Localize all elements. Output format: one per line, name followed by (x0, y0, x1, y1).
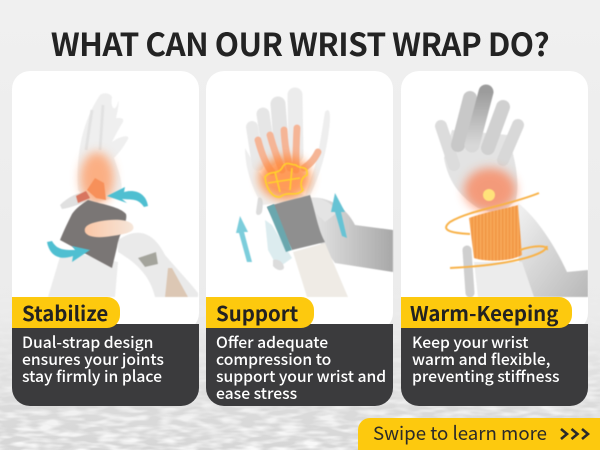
caption: ease stress (216, 381, 297, 404)
heading tag: Warm-Keeping (410, 297, 558, 327)
caption (412, 330, 560, 387)
arrow: top blue (107, 187, 148, 207)
heading tag: Support (216, 297, 298, 327)
grey wrap (267, 195, 325, 250)
title: WHAT CAN OUR WRIST WRAP DO? (51, 20, 549, 66)
illustration: hand with wrap (236, 88, 394, 298)
caption: ensures your joints (22, 347, 164, 370)
image card (12, 71, 199, 331)
grey wrap (60, 200, 126, 268)
illustration: wrist with straps (46, 94, 198, 298)
arrow: right up (331, 193, 347, 238)
icon: chevrons (560, 428, 590, 440)
arrow: bottom blue (47, 241, 90, 262)
arrow: left up (236, 216, 252, 262)
swipe text: Swipe to learn more (373, 419, 547, 446)
panel: warm-keeping (401, 71, 588, 406)
caption: Offer adequate (216, 330, 328, 353)
dark caption box (12, 324, 199, 406)
caption: stay firmly in place (22, 364, 162, 387)
caption: Dual-strap design (22, 330, 153, 353)
image card (401, 71, 588, 331)
caption: preventing stiffness (412, 364, 560, 387)
background with knit texture (0, 337, 600, 450)
glowing carpal bones (265, 163, 307, 197)
caption: compression to (216, 347, 331, 370)
thumb (85, 220, 134, 237)
orange ribbed wrap (469, 205, 522, 261)
caption (22, 330, 164, 387)
caption: Keep your wrist (412, 330, 529, 353)
heat swirl (446, 193, 547, 268)
orange glow (80, 152, 114, 204)
image card (206, 71, 393, 331)
panel: stabilize (12, 71, 199, 406)
swipe banner (358, 418, 600, 450)
caption: warm and flexible, (412, 347, 550, 370)
dark caption box (206, 324, 393, 406)
panel: support (206, 71, 394, 406)
caption (216, 330, 386, 404)
caption: support your wrist and (216, 364, 386, 387)
illustration: warming wrap (434, 84, 588, 298)
heading tag: Stabilize (22, 297, 108, 327)
dark caption box (401, 324, 588, 406)
